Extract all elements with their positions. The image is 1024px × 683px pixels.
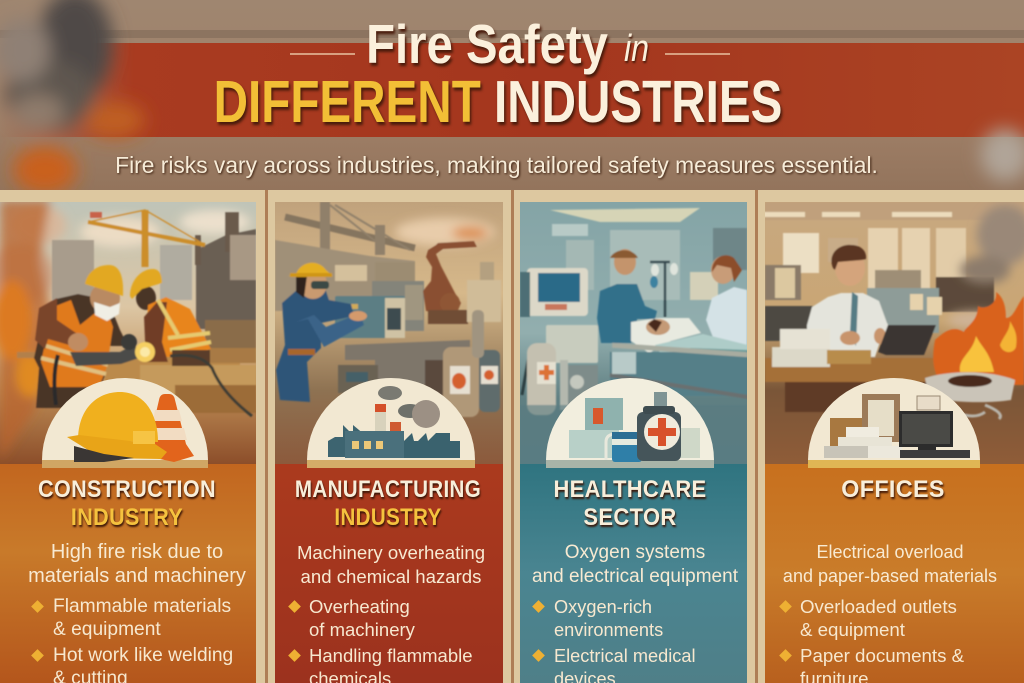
panel: healthcare <box>532 476 738 683</box>
bullet list: Overloaded outlets <box>800 596 957 617</box>
bullet list <box>288 596 473 683</box>
description <box>28 541 246 586</box>
title: in <box>624 28 649 70</box>
description: and paper-based materials <box>783 566 997 586</box>
description <box>532 542 738 586</box>
scene: construction <box>0 200 256 460</box>
description: Machinery overheating <box>297 542 485 563</box>
heading <box>295 476 482 531</box>
scene panels <box>0 202 1024 464</box>
scene: healthcare <box>520 208 748 465</box>
bullet list: Hot work like welding <box>53 645 233 666</box>
heading: CONSTRUCTION <box>38 476 216 503</box>
bullet list: Flammable materials <box>53 596 231 617</box>
heading: HEALTHCARE <box>553 476 707 503</box>
description: and chemical hazards <box>301 566 481 586</box>
bullet list: Oxygen-rich <box>554 597 652 617</box>
icon: hard hat and cone <box>42 378 208 468</box>
bullet list <box>779 596 964 683</box>
description: materials and machinery <box>28 564 246 586</box>
title: DIFFERENT INDUSTRIES <box>214 69 782 135</box>
description: Electrical overload <box>816 542 964 562</box>
description <box>297 542 485 586</box>
description: Oxygen systems <box>565 542 705 563</box>
bullet list: environments <box>554 620 663 640</box>
heading: OFFICES <box>841 476 945 503</box>
heading: INDUSTRY <box>71 504 183 531</box>
icon: factory <box>307 378 475 468</box>
bullet list: & equipment <box>53 618 161 640</box>
scene: offices <box>760 202 1024 419</box>
panel: offices <box>779 476 997 683</box>
bullet list: Handling flammable <box>309 645 473 666</box>
bullet list: & equipment <box>800 618 905 640</box>
bullet list: of machinery <box>309 618 415 640</box>
heading: SECTOR <box>583 504 677 531</box>
title: Fire Safety <box>366 13 608 75</box>
description: High fire risk due to <box>51 541 223 563</box>
heading <box>38 476 216 531</box>
bullet list <box>31 596 233 683</box>
icon: office items <box>808 378 980 468</box>
bullet list: Overheating <box>309 596 410 617</box>
heading: MANUFACTURING <box>295 476 481 503</box>
description <box>783 542 997 586</box>
panel: manufacturing <box>288 476 485 683</box>
icon: medical supplies <box>546 378 714 468</box>
subtitle: Fire risks vary across industries, making tailored safety measures essential. <box>115 152 878 178</box>
heading <box>553 476 708 531</box>
title <box>214 13 784 135</box>
scene: manufacturing <box>275 202 501 417</box>
bullet list: Paper documents & <box>800 645 964 666</box>
description: and electrical equipment <box>532 566 738 586</box>
bullet list: Electrical medical <box>554 646 696 666</box>
frames <box>0 190 1024 683</box>
heading: INDUSTRY <box>334 504 442 531</box>
column bodies <box>0 464 1024 683</box>
bullet list <box>532 597 696 683</box>
panel: construction <box>28 476 246 683</box>
title decorative lines <box>290 53 730 55</box>
